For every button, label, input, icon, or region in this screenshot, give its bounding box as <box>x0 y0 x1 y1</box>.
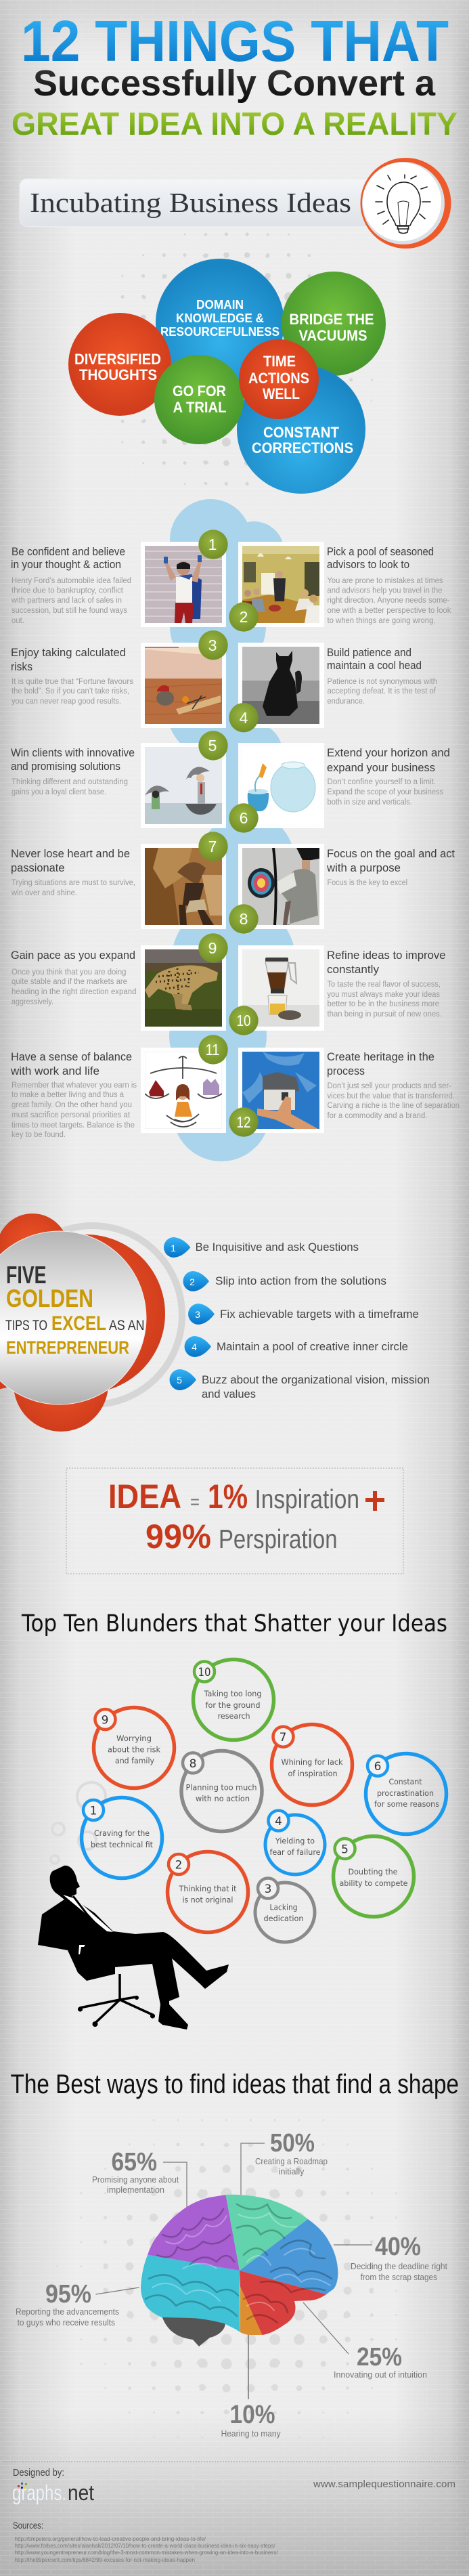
panel: five golden tips badge <box>0 1214 182 1432</box>
bubble: time actions well <box>239 339 319 419</box>
tip 12 text: Carving a niche is the line of separation <box>328 1102 460 1110</box>
bubble: go for a trial <box>154 355 244 444</box>
tip 2 text: advisors to look to <box>327 558 409 571</box>
golden tip 3: Fix achievable targets with a timeframe <box>220 1308 419 1321</box>
tip 12 text: Don’t just sell your products and ser- <box>328 1082 451 1090</box>
tip 11 text: Have a sense of balance <box>11 1050 132 1063</box>
tip 11 text: Remember that whatever you earn is <box>12 1081 137 1090</box>
bubble: domain knowledge: KNOWLEDGE & <box>176 312 264 325</box>
blunder 9: and family <box>115 1756 154 1765</box>
tip 7 text: passionate <box>11 861 65 874</box>
tip 7 text: win over and shine. <box>11 889 77 897</box>
tip 9 text: heading in the right direction expand <box>12 988 137 996</box>
blunder 5: 5 <box>341 1843 349 1857</box>
blunder 2: is not original <box>183 1895 233 1905</box>
bubble: bridge the vacuums: VACUUMS <box>299 327 367 344</box>
tip 6 text <box>327 746 450 807</box>
blunder 1: best technical fit <box>91 1840 153 1849</box>
footer: designed by: Designed by: <box>13 2467 64 2478</box>
badge 8: 8 <box>240 910 248 928</box>
blunder 9: 9 <box>102 1713 108 1727</box>
logo: graphs.net: net <box>68 2481 94 2505</box>
panel: idea equation <box>66 1468 403 1574</box>
tip 11 text: with work and life <box>10 1065 99 1077</box>
photo 3: mouse and trap <box>145 647 222 724</box>
blunder 5: Doubting the <box>348 1867 398 1876</box>
sources: http://www.forbes.com/sites/alanhall/2012/07/10/how-to-create-a-world-class-business-idea-in-six-easy-steps/ <box>15 2542 275 2549</box>
tip 10 text: Refine ideas to improve <box>327 949 445 962</box>
halftone dots behind brain <box>55 2096 421 2462</box>
segment: red 25% <box>240 2271 326 2335</box>
tip 12 text <box>327 1050 460 1120</box>
stat: 65%: Promising anyone about <box>92 2174 179 2185</box>
golden tip 4 <box>185 1336 408 1357</box>
tip 4 text: Patience is not synonymous with <box>328 678 437 686</box>
blunder 3: Lacking <box>269 1903 298 1912</box>
brain folds <box>146 2204 332 2323</box>
bubble: diversified thoughts <box>68 313 171 416</box>
stat: 40%: 40% <box>375 2233 421 2261</box>
tip 9 text: aggressively. <box>12 998 53 1006</box>
bubble: constant corrections: CONSTANT <box>263 424 340 441</box>
photo 1: superhero boy <box>145 546 222 623</box>
badge 4 <box>229 703 259 732</box>
golden tip 4: Maintain a pool of creative inner circle <box>217 1340 408 1353</box>
tip 10 text: better to be in the business more <box>328 1000 439 1008</box>
badge 12: 12 <box>237 1113 250 1131</box>
stat: 65% <box>92 2148 179 2195</box>
icon: light bulb badge <box>360 158 451 249</box>
golden tips list <box>164 1237 430 1400</box>
bubble: time actions well: WELL <box>263 385 300 402</box>
blunder circles <box>81 1659 447 1942</box>
leader lines <box>96 2143 372 2399</box>
badge 2: 2 <box>240 608 248 626</box>
bubble: go for a trial: A TRIAL <box>173 399 226 416</box>
tip 4 text: endurance. <box>328 697 365 706</box>
golden tip 2: Slip into action from the solutions <box>215 1274 386 1287</box>
blunder 10: Taking too long <box>204 1689 261 1698</box>
tip 4 text: maintain a cool head <box>327 659 422 672</box>
blunder 5 <box>333 1837 414 1916</box>
badge 8 <box>229 904 259 934</box>
blunder 10: 10 <box>198 1666 211 1679</box>
stat: 10% <box>221 2401 281 2439</box>
badge 3 <box>198 630 228 660</box>
blunder 10 <box>194 1659 273 1740</box>
tip 1 text: Be confident and believe <box>12 545 125 558</box>
blunder 4: fear of failure <box>269 1847 321 1857</box>
tip 11 text: must sacrifice personal priorities at <box>12 1111 131 1119</box>
tip 4 text: Build patience and <box>327 646 411 659</box>
tip 1 text <box>11 545 131 625</box>
badge 5: 5 <box>208 737 217 754</box>
badge 6: 6 <box>240 809 248 827</box>
tip 10 text: you must always make your ideas <box>328 991 440 999</box>
tip 12 text: process <box>327 1065 365 1077</box>
tip 1 text: thrice due to bankruptcy, conflict <box>12 587 124 595</box>
tip 10 text: constantly <box>327 963 379 976</box>
stat: 10%: Hearing to many <box>221 2428 281 2439</box>
badge heading: AS AN <box>109 1318 145 1333</box>
segment: blue 40% <box>240 2219 338 2294</box>
golden tip 1: 1 <box>171 1243 176 1253</box>
stat: 40%: Deciding the deadline right <box>351 2261 447 2271</box>
tip 6 text: Extend your horizon and <box>327 746 450 759</box>
blunder 2 <box>168 1851 248 1933</box>
blunder 10: research <box>218 1711 250 1721</box>
badge 9: 9 <box>208 939 217 957</box>
badge 10 <box>229 1006 259 1035</box>
tip 1 text: Henry Ford’s automobile idea failed <box>12 577 131 585</box>
tip 9 text: Gain pace as you expand <box>11 949 135 962</box>
blunder 9: about the risk <box>108 1745 160 1755</box>
blunder 6: Constant <box>388 1777 422 1786</box>
tip 4 text: accepting defeat. It is the test of <box>328 687 437 695</box>
tip 8 text: Focus is the key to excel <box>328 879 407 887</box>
tip 6 text: expand your business <box>327 761 435 774</box>
tip 7 text: Trying situations are must to survive, <box>12 879 135 887</box>
badge 1 <box>198 530 228 559</box>
blunder 7 <box>272 1724 352 1805</box>
tip 8 text <box>326 847 455 887</box>
panel: idea equation: Inspiration <box>254 1485 359 1514</box>
tip 5 text: Thinking different and outstanding <box>12 778 128 786</box>
badge 4: 4 <box>240 709 248 727</box>
blunder 7: of inspiration <box>288 1769 337 1778</box>
badge 10: 10 <box>237 1012 250 1029</box>
stat: 95%: 95% <box>45 2280 91 2309</box>
tip 1 text: out. <box>12 617 24 625</box>
tip 1 text: with partners and lack of sales in <box>11 597 122 605</box>
blunder 4: 4 <box>275 1815 282 1828</box>
stat: 50%: initially <box>279 2166 305 2176</box>
tip 7 text <box>11 847 135 897</box>
photo 5: umbrella cartoon <box>145 747 222 824</box>
stat: 25% <box>334 2343 427 2380</box>
stat: 50% <box>255 2129 328 2176</box>
golden tip 2: 2 <box>189 1276 195 1287</box>
bubble: bridge the vacuums <box>282 272 386 376</box>
tip 4 text <box>327 646 437 706</box>
tip 3 text: you can never reap good results. <box>12 697 121 706</box>
tip 3 text: Enjoy taking calculated <box>11 646 126 659</box>
badge 7: 7 <box>208 838 217 855</box>
blunder 3: dedication <box>264 1914 303 1923</box>
badge 12 <box>229 1107 259 1137</box>
photo 10: tea filter pitcher <box>242 949 319 1027</box>
blunder 9 <box>93 1708 175 1788</box>
white photo frames <box>141 542 324 1133</box>
blunder 6 <box>365 1754 447 1834</box>
badge heading: GOLDEN <box>6 1285 93 1312</box>
panel: idea equation: IDEA <box>108 1478 181 1516</box>
tip 2 text: to when things are going wrong. <box>328 617 436 625</box>
blunder 7: 7 <box>280 1731 286 1744</box>
tip 11 text: times to meet targets. Balance is the <box>12 1121 135 1130</box>
segment: orange 10% <box>240 2287 263 2335</box>
sources: http://timpeters.org/general/how-to-lead-creative-people-and-bring-ideas-to-life/ <box>15 2535 206 2542</box>
tip 3 text: risks <box>11 660 32 673</box>
tip 3 text <box>11 646 133 706</box>
tip 10 text: than being in pursuit of new ones. <box>328 1010 442 1018</box>
badge 7 <box>198 832 228 861</box>
badge 3: 3 <box>208 637 217 654</box>
photo 7: warrior and lion <box>145 848 222 925</box>
stat: 65%: 65% <box>111 2148 157 2176</box>
stat: 95%: to guys who receive results <box>18 2317 115 2327</box>
tip 1 text: in your thought & action <box>11 558 121 571</box>
golden tip 5 <box>169 1369 430 1400</box>
bubble: bridge the vacuums: BRIDGE THE <box>290 311 374 328</box>
stat: 95%: Reporting the advancements <box>16 2306 119 2317</box>
badge 11 <box>198 1035 228 1065</box>
blunder 9: Worrying <box>116 1734 152 1743</box>
tip 12 text: vices but the value that is transferred. <box>328 1092 455 1100</box>
panel: idea equation: 1% <box>208 1478 248 1516</box>
golden tip 5: and values <box>202 1388 256 1400</box>
bubble: constant corrections: CORRECTIONS <box>252 439 353 456</box>
blue cloud backdrop <box>167 499 296 1161</box>
blunder 4: Yielding to <box>275 1837 315 1846</box>
number badges <box>198 530 259 1137</box>
bubble: domain knowledge: RESOURCEFULNESS <box>160 325 280 339</box>
tip 11 text: great family. On the other hand you <box>12 1101 132 1109</box>
stat: 40%: from the scrap stages <box>361 2272 437 2282</box>
golden tip 3 <box>188 1304 419 1325</box>
sources: http://the99percent.com/tips/6842/99-excuses-for-not-making-ideas-happen <box>15 2556 195 2563</box>
segment: mint 50% <box>226 2194 308 2271</box>
tip 2 text: right direction. Anyone needs some- <box>328 597 450 605</box>
golden tip 5: 5 <box>177 1375 182 1386</box>
golden tip 2 <box>183 1271 386 1291</box>
blunder 4 <box>265 1811 325 1874</box>
blunder 8: Planning too much <box>185 1783 257 1793</box>
bubble cluster <box>68 259 386 494</box>
sources: Sources: <box>13 2520 43 2531</box>
panel: idea equation: 99% <box>146 1518 211 1555</box>
halftone dots behind bubbles <box>88 223 379 494</box>
banner: Incubating Business Ideas <box>20 158 451 249</box>
photo 9: running cheetah <box>145 949 222 1027</box>
tip 12 text: for a commodity and a brand. <box>328 1112 428 1120</box>
blunder 5: ability to compete <box>340 1879 407 1888</box>
blunder 8 <box>181 1751 262 1831</box>
bubble: go for a trial: GO FOR <box>173 383 226 400</box>
thought bubbles <box>51 1782 106 1864</box>
tip 2 text: Pick a pool of seasoned <box>327 545 434 558</box>
tip 9 text: quite stable and if the markets are <box>12 978 127 986</box>
tip 5 text <box>11 746 135 796</box>
website url: www.samplequestionnaire.com <box>313 2478 455 2490</box>
title line 2: Successfully Convert a <box>33 63 436 104</box>
tip 2 text: You are prone to mistakes at times <box>328 577 443 585</box>
stat: 40% <box>351 2233 447 2282</box>
badge heading: EXCEL <box>51 1312 106 1335</box>
tip 11 text <box>10 1050 137 1139</box>
tip 3 text: the bold”. So if you can’t take risks, <box>12 687 129 695</box>
tip 11 text: key to be found. <box>12 1131 66 1139</box>
segment: purple 65% <box>148 2195 240 2271</box>
blunder 7: Whining for lack <box>282 1757 343 1767</box>
photo 4: black cat <box>242 647 319 724</box>
tip 2 text: one with a better perspective to look <box>328 607 451 615</box>
sources <box>13 2520 278 2563</box>
bubble: domain knowledge <box>156 259 284 387</box>
blunder 1: Craving for the <box>94 1828 150 1838</box>
tip 7 text: Never lose heart and be <box>11 847 130 860</box>
badge heading: ENTREPRENEUR <box>6 1337 129 1358</box>
blunder 10: for the ground <box>206 1700 260 1710</box>
tip 11 text: to make a better living and thus a <box>12 1091 125 1099</box>
tip 2 text: and advisors help you travel in the <box>328 587 443 595</box>
blunder 8: with no action <box>196 1794 250 1803</box>
stat: 50%: 50% <box>270 2129 315 2158</box>
stat: 95% <box>16 2280 119 2327</box>
silhouette: thinking businessman in chair <box>38 1866 229 2030</box>
bubble: diversified thoughts: THOUGHTS <box>79 366 157 383</box>
photo 12: house in a hand <box>242 1052 319 1129</box>
tip 5 text: Win clients with innovative <box>11 746 135 759</box>
blunder 3: 3 <box>265 1883 271 1896</box>
panel: idea equation: = <box>190 1491 200 1512</box>
stat: 65%: implementation <box>107 2185 164 2195</box>
tip 12 text: Create heritage in the <box>327 1050 434 1063</box>
cerebellum <box>162 2316 225 2346</box>
badge 5 <box>198 731 228 760</box>
brain chart <box>141 2194 338 2346</box>
tip 6 text: Don’t confine yourself to a limit. <box>328 778 436 786</box>
photo 11: balance scale <box>145 1052 222 1129</box>
blunder 8: 8 <box>189 1757 196 1771</box>
photo 6: goldfish jumping bowls <box>248 761 315 813</box>
sources: http://www.youngentrepreneur.com/blog/the-3-most-common-mistakes-when-growing-an-idea-into-a-business/ <box>15 2549 278 2556</box>
banner heading: Incubating Business Ideas <box>30 187 351 218</box>
bubble: constant corrections <box>237 365 365 494</box>
tip 8 text: Focus on the goal and act <box>327 847 455 860</box>
panel: idea equation: Perspiration <box>219 1525 337 1554</box>
badge heading <box>5 1261 145 1358</box>
logo: graphs.net: graphs. <box>12 2481 66 2505</box>
stat: 25%: Innovating out of intuition <box>334 2369 427 2380</box>
badge 11: 11 <box>206 1041 219 1058</box>
bubble: domain knowledge: DOMAIN <box>196 298 244 312</box>
golden tip 1: Be Inquisitive and ask Questions <box>196 1241 359 1253</box>
tip 5 text: gains you a loyal client base. <box>12 788 106 796</box>
segment: cyan 95% <box>141 2255 240 2332</box>
blunder 3 <box>255 1879 315 1942</box>
golden tip 4: 4 <box>192 1341 197 1352</box>
blunder 1 <box>81 1797 162 1879</box>
blunder 6: procrastination <box>377 1788 434 1798</box>
golden tip 3: 3 <box>195 1309 200 1320</box>
blunder 1: 1 <box>90 1804 97 1818</box>
footer: designed by <box>12 2467 94 2505</box>
blunder 6: for some reasons <box>374 1799 439 1809</box>
tip 1 text: succession, but still he found ways <box>12 607 127 615</box>
bubble: diversified thoughts: DIVERSIFIED <box>74 351 161 368</box>
badge 2 <box>229 602 259 632</box>
badge 6 <box>229 803 259 833</box>
tip 2 text <box>327 545 451 625</box>
tip 9 text: Once you think that you are doing <box>12 968 126 976</box>
tip 8 text: with a purpose <box>326 861 401 874</box>
tip 3 text: It is quite true that “Fortune favours <box>12 678 133 686</box>
photo 2: meeting room <box>242 546 319 623</box>
golden tip 5: Buzz about the organizational vision, mission <box>202 1373 430 1386</box>
title <box>12 9 457 142</box>
blunder 2: 2 <box>175 1858 182 1872</box>
blunder 2: Thinking that it <box>179 1884 237 1893</box>
tip 10 text: To taste the real flavor of success, <box>328 981 441 989</box>
blunder 6: 6 <box>374 1760 381 1774</box>
tip 6 text: Expand the scope of your business <box>328 788 443 796</box>
title line 3: GREAT IDEA INTO A REALITY <box>12 106 457 142</box>
stat: 50%: Creating a Roadmap <box>255 2156 328 2166</box>
badge heading: FIVE <box>6 1261 46 1289</box>
golden tip 1 <box>164 1237 359 1258</box>
tip 6 text: both in size and verticals. <box>328 798 412 807</box>
stat: 25%: 25% <box>357 2343 402 2371</box>
bubble: time actions well: ACTIONS <box>248 370 309 387</box>
stat: 10%: 10% <box>230 2401 275 2429</box>
tip 9 text <box>11 949 137 1006</box>
bubble: time actions well: TIME <box>263 353 296 370</box>
badge heading: TIPS TO <box>5 1318 47 1333</box>
tip 10 text <box>327 949 445 1018</box>
photo 8: archer and target <box>242 848 319 925</box>
badge 9 <box>198 933 228 963</box>
tip 5 text: and promising solutions <box>11 760 120 773</box>
badge 1: 1 <box>208 536 217 553</box>
